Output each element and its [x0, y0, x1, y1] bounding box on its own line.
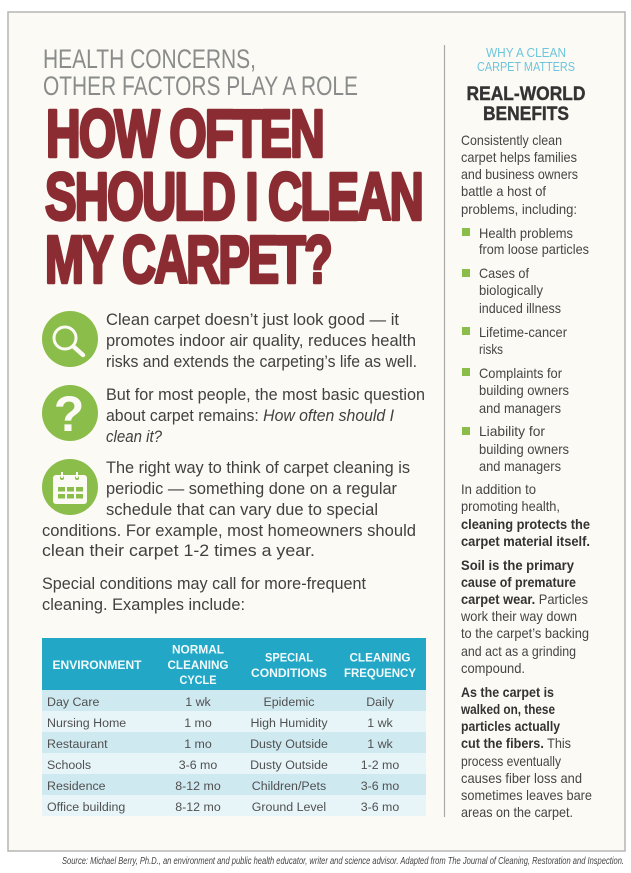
- text block: protects the carpet: [461, 481, 590, 549]
- sidebar intro text: [461, 132, 578, 217]
- text block: protects the carpet: In addition to: [461, 481, 536, 497]
- text block: periodic cleaning: schedule that can vary due to special: [106, 501, 378, 519]
- table row: Office building: Office building: [47, 800, 125, 814]
- bullet: complaints: [462, 365, 569, 416]
- table header: ENVIRONMENT: [52, 658, 142, 672]
- table row: Residence: 8-12 mo: [175, 779, 221, 793]
- sidebar kicker: [477, 45, 575, 74]
- text block: protects the carpet: carpet material itself.: [461, 533, 590, 549]
- bullet: biologically induced illness: induced illness: [479, 300, 561, 316]
- text block: question: [106, 386, 425, 446]
- icon: question mark: ?: [54, 386, 84, 442]
- bullet: biologically induced illness: [462, 265, 561, 316]
- sidebar intro text: carpet helps families: [461, 149, 577, 165]
- text block: intro: promotes indoor air quality, reduces health: [106, 332, 416, 350]
- heading: kicker: HEALTH CONCERNS,: [43, 44, 256, 74]
- title: SHOULD I CLEAN: [45, 160, 422, 234]
- table header: NORMAL: [172, 642, 224, 656]
- text block: protects the carpet: cleaning protects the: [461, 516, 590, 532]
- sidebar intro text: battle a host of: [461, 183, 546, 199]
- icon: magnifying glass: [42, 311, 98, 367]
- table row: Nursing Home: High Humidity: [250, 716, 328, 730]
- table row: Restaurant: 1 wk: [367, 737, 394, 751]
- text block: soil: Soil is the primary: [461, 557, 574, 573]
- bullet: lifetime-cancer risks: Lifetime-cancer: [479, 324, 567, 340]
- text block: fibers: cut the fibers. This: [461, 735, 571, 751]
- table row: Day Care: [42, 690, 426, 711]
- table row: Nursing Home: 1 mo: [184, 716, 212, 730]
- bullet: liability: [462, 423, 569, 474]
- text block: fibers: process eventually: [461, 753, 561, 769]
- table row: Schools: [42, 753, 426, 774]
- table row: Nursing Home: Nursing Home: [47, 716, 126, 730]
- table: cleaning frequency: [42, 638, 426, 816]
- bullet: health problems: from loose particles: [479, 241, 589, 257]
- text block: fibers: particles actually: [461, 718, 560, 734]
- table header: CONDITIONS: [251, 666, 327, 680]
- text block: soil: carpet wear. Particles: [461, 591, 588, 607]
- text block: soil: to the carpet’s backing: [461, 625, 589, 641]
- table row: Residence: Residence: [47, 779, 106, 793]
- sidebar intro text: Consistently clean: [461, 132, 562, 148]
- sidebar kicker: CARPET MATTERS: [477, 59, 575, 74]
- table row: Nursing Home: 1 wk: [367, 716, 394, 730]
- text block: question: about carpet remains: How often should I: [106, 407, 394, 425]
- bullet: liability: Liability for: [479, 423, 545, 439]
- text block: special conditions: cleaning. Examples include:: [42, 596, 245, 614]
- title: [45, 96, 422, 298]
- text block: fibers: areas on the carpet.: [461, 804, 573, 820]
- bullet: complaints: and managers: [479, 400, 561, 416]
- table row: Day Care: Daily: [366, 695, 395, 709]
- table row: Residence: 3-6 mo: [361, 779, 399, 793]
- heading: kicker: OTHER FACTORS PLAY A ROLE: [43, 71, 358, 101]
- text block: periodic cleaning: periodic — something done on a regular: [106, 480, 397, 498]
- text block: periodic cleaning: conditions. For example, most homeowners should: [42, 522, 416, 540]
- text block: special conditions: [42, 575, 366, 614]
- text block: soil: and act as a grinding: [461, 643, 576, 659]
- bullet: lifetime-cancer risks: [462, 324, 567, 357]
- text block: soil: cause of premature: [461, 574, 576, 590]
- text block: soil: compound.: [461, 660, 525, 676]
- table row: Schools: Schools: [47, 758, 91, 772]
- table header: SPECIAL: [265, 650, 313, 664]
- table row: Day Care: Epidemic: [264, 695, 314, 709]
- text block: fibers: [460, 684, 592, 820]
- title: MY CARPET?: [45, 222, 331, 298]
- sidebar heading: REAL-WORLD: [466, 83, 586, 105]
- heading: kicker: [43, 44, 358, 101]
- table row: Schools: 1-2 mo: [361, 758, 399, 772]
- table row: Day Care: 1 wk: [185, 695, 212, 709]
- table header: FREQUENCY: [344, 666, 416, 680]
- sidebar heading: BENEFITS: [483, 103, 569, 125]
- text block: intro: [106, 311, 417, 371]
- table row: Restaurant: Restaurant: [47, 737, 108, 751]
- table header: CYCLE: [180, 673, 217, 687]
- table row: Residence: [42, 774, 426, 795]
- bullet: biologically induced illness: biologically: [479, 282, 543, 298]
- text block: soil: [460, 557, 589, 676]
- table row: Office building: 3-6 mo: [361, 800, 399, 814]
- table row: Office building: 8-12 mo: [175, 800, 221, 814]
- sidebar heading: [466, 83, 586, 125]
- table row: Office building: Ground Level: [252, 800, 326, 814]
- table row: Nursing Home: [42, 711, 426, 732]
- bullet: complaints: building owners: [479, 382, 569, 398]
- text block: fibers: causes fiber loss and: [461, 770, 582, 786]
- icon: question mark: [42, 385, 98, 442]
- text block: intro: risks and extends the carpeting’s life as well.: [106, 353, 417, 371]
- table row: Restaurant: 1 mo: [184, 737, 212, 751]
- text block: question: But for most people, the most basic question: [106, 386, 425, 404]
- icon: calendar: [42, 459, 98, 515]
- title: HOW OFTEN: [46, 96, 323, 172]
- table header: CLEANING: [168, 658, 228, 672]
- text block: fibers: As the carpet is: [461, 684, 554, 700]
- text block: fibers: sometimes leaves bare: [461, 787, 592, 803]
- text block: periodic cleaning: clean their carpet 1-2 times a year.: [42, 542, 315, 560]
- sidebar kicker: WHY A CLEAN: [486, 45, 566, 60]
- table header: [42, 638, 426, 690]
- bullet: health problems: [462, 225, 589, 257]
- text block: question: clean it?: [106, 428, 163, 446]
- text block: special conditions: Special conditions may call for more-frequent: [42, 575, 366, 593]
- bullet: biologically induced illness: Cases of: [479, 265, 529, 281]
- bullet: lifetime-cancer risks: risks: [479, 341, 503, 357]
- table row: Office building: [42, 795, 426, 816]
- table row: Schools: 3-6 mo: [179, 758, 217, 772]
- bullet: complaints: Complaints for: [479, 365, 562, 381]
- table row: Schools: Dusty Outside: [250, 758, 328, 772]
- sidebar intro text: and business owners: [461, 166, 578, 182]
- text block: protects the carpet: promoting health,: [461, 498, 560, 514]
- text block: fibers: walked on, these: [460, 701, 555, 717]
- text block: intro: Clean carpet doesn’t just look good — it: [106, 311, 399, 329]
- table row: Restaurant: Dusty Outside: [250, 737, 328, 751]
- table row: Residence: Children/Pets: [252, 779, 326, 793]
- table header: CLEANING: [350, 650, 410, 664]
- bullet: liability: building owners: [479, 441, 569, 457]
- sidebar intro text: problems, including:: [461, 201, 577, 217]
- table row: Restaurant: [42, 732, 426, 753]
- text block: soil: work their way down: [460, 608, 577, 624]
- text block: periodic cleaning: [42, 459, 416, 560]
- table row: Day Care: Day Care: [47, 695, 99, 709]
- bullet: health problems: Health problems: [479, 225, 573, 241]
- text block: periodic cleaning: The right way to think of carpet cleaning is: [106, 459, 410, 477]
- bullet: liability: and managers: [479, 458, 561, 474]
